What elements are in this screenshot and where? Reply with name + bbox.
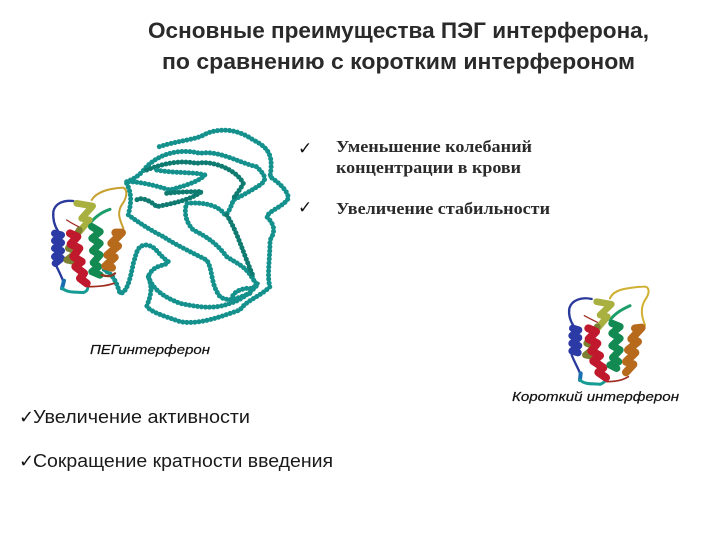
helix yellow-green <box>77 203 93 232</box>
title: по сравнению с коротким интерфероном <box>162 49 635 74</box>
benefit: increased stability: Увеличение стабильности <box>336 199 551 218</box>
protein ribbon <box>53 188 126 293</box>
helix olive <box>67 230 79 262</box>
title: Основные преимущества ПЭГ интерферона, <box>148 18 649 43</box>
label: PEG interferon: ПЕГинтерферон <box>90 342 210 357</box>
benefit: increased activity: ✓ <box>19 407 34 428</box>
benefit: reduced dosing frequency: ✓ <box>19 451 34 472</box>
benefit: reduced fluctuations <box>298 137 533 177</box>
title <box>148 18 649 74</box>
icon: PEG interferon protein model <box>53 130 288 322</box>
helix orange <box>105 233 122 268</box>
list: right benefits <box>298 137 551 218</box>
benefit: increased activity: Увеличение активности <box>33 406 250 427</box>
list: bottom benefits <box>19 406 333 472</box>
helix green <box>92 227 100 275</box>
label: short interferon: Короткий интерферон <box>512 389 679 404</box>
benefit: reduced fluctuations: ✓ <box>298 139 312 159</box>
PEG polymer chain <box>103 130 288 322</box>
benefit: reduced dosing frequency: Сокращение кратности введения <box>33 450 333 471</box>
benefit: reduced fluctuations: Уменьшение колебаний <box>336 137 533 156</box>
icon: short interferon protein model <box>569 287 649 384</box>
helix blue <box>55 233 61 263</box>
benefit: reduced fluctuations: концентрации в крови <box>336 158 522 177</box>
helix red <box>70 233 87 283</box>
benefit: increased stability: ✓ <box>298 198 312 218</box>
